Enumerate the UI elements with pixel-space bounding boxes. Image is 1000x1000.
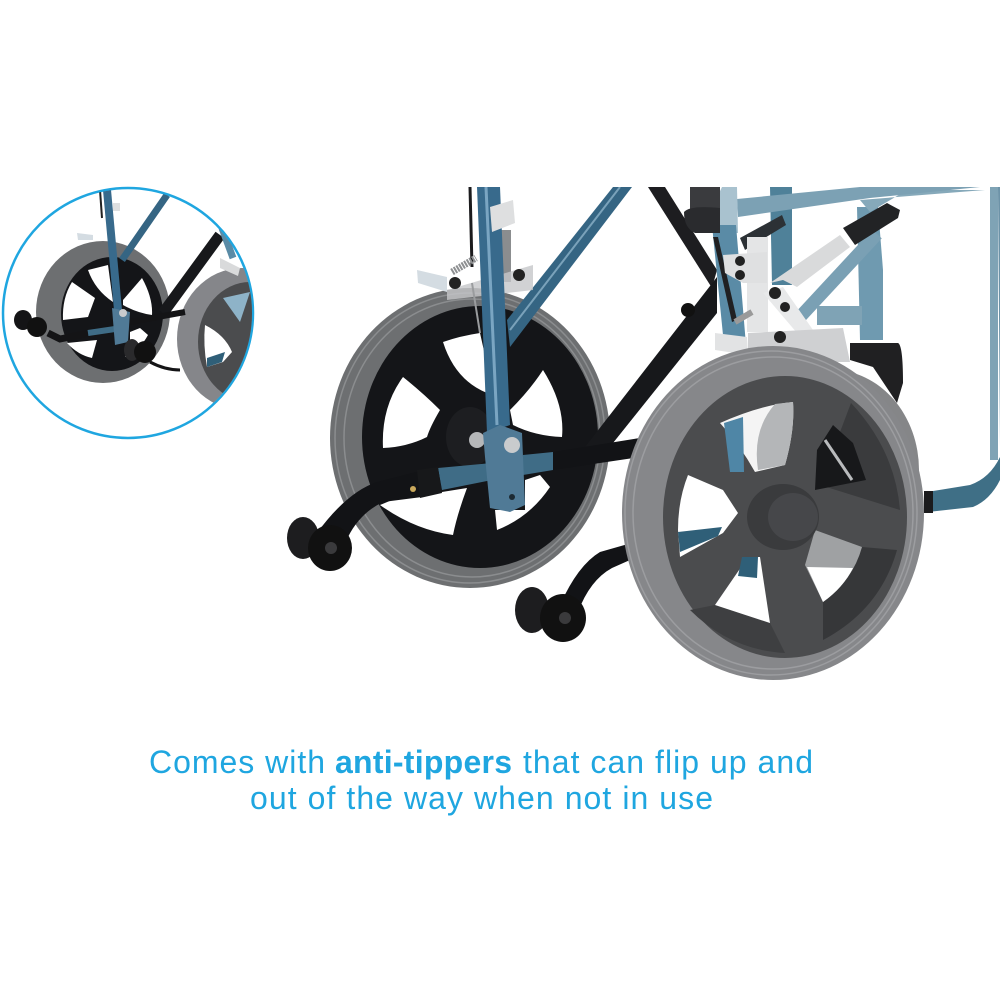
inset rear wheel — [36, 241, 170, 383]
left wheel — [330, 288, 610, 588]
axle bracket — [483, 425, 525, 512]
inset black tube — [163, 235, 220, 313]
inset blue tubes — [122, 195, 167, 260]
caption — [149, 744, 813, 816]
back right wheel behind main wheel — [856, 374, 919, 470]
inset brake pieces — [77, 233, 93, 240]
brake lever assembly — [715, 203, 900, 362]
inset casters — [14, 310, 32, 330]
clamp on post — [490, 200, 515, 232]
caption line 1 lead: Comes with — [149, 744, 325, 780]
main photo: wheelchair rear wheels with anti-tippers — [287, 187, 1000, 680]
anti-tipper right — [515, 544, 630, 642]
vertical blue post — [477, 187, 510, 433]
dark sectors — [828, 403, 900, 510]
caption line 1 bold: anti-tippers — [335, 744, 512, 780]
bolt on diagonal tube — [681, 303, 695, 317]
caption line 1 tail: that can flip up and — [523, 744, 813, 780]
horizontal axle tube — [438, 438, 640, 490]
black diagonal tube — [598, 277, 717, 445]
cushion knob and fastener — [684, 187, 720, 233]
wheel cutouts — [443, 333, 486, 392]
brake parts behind post — [417, 187, 533, 333]
inset second wheel — [177, 268, 252, 403]
inset anti-tipper bar — [46, 330, 67, 343]
blue diagonal tube — [507, 187, 632, 347]
right wheel — [622, 346, 924, 680]
right wheel cutouts — [720, 402, 793, 472]
caption line 2: out of the way when not in use — [250, 780, 713, 816]
inset circle: anti-tipper flipped position — [2, 186, 254, 440]
anti-tipper left — [287, 467, 442, 571]
inset curved arm below wheel — [150, 362, 180, 370]
far side frame and tubes — [648, 187, 1000, 513]
